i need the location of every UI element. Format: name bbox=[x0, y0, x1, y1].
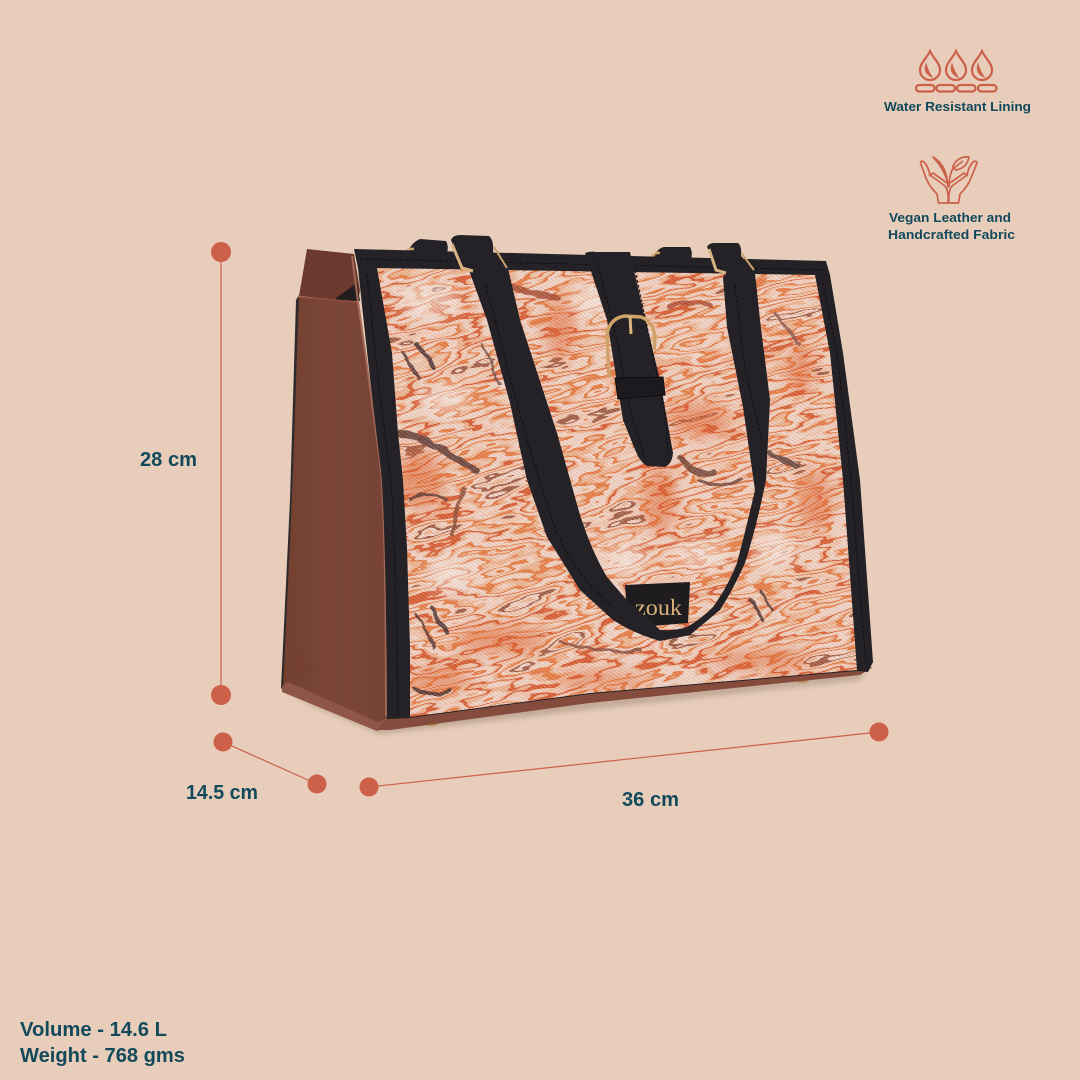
front handle bbox=[470, 263, 770, 641]
feature: vegan leather and handcrafted fabric: Vegan Leather and bbox=[889, 210, 1011, 225]
black frame bbox=[354, 249, 873, 719]
dimension: height 28 cm: 28 cm bbox=[140, 449, 197, 471]
feature: water resistant lining bbox=[884, 51, 1031, 114]
icon: water drops bbox=[916, 51, 996, 92]
shoulder loops with gold rings bbox=[451, 235, 754, 273]
logo patch bbox=[625, 582, 690, 628]
warm tint bbox=[370, 262, 865, 722]
back loops bbox=[405, 239, 692, 260]
buckle strap bbox=[585, 252, 673, 467]
feature: vegan leather and handcrafted fabric: Handcrafted Fabric bbox=[888, 227, 1015, 242]
frame stitching bbox=[360, 259, 866, 716]
metal feet bbox=[423, 675, 809, 726]
orange patches bbox=[396, 300, 831, 692]
light patches bbox=[400, 282, 797, 590]
marbled fabric panel bbox=[377, 268, 857, 717]
logo patch: zouk bbox=[635, 595, 683, 620]
dimension: height 28 cm bbox=[140, 242, 231, 705]
icon: hands holding plant bbox=[920, 157, 977, 203]
dimension: depth 14.5 cm bbox=[186, 732, 326, 804]
ground shadow bbox=[290, 672, 866, 734]
specs: volume and weight bbox=[20, 1019, 185, 1067]
side gusset bbox=[281, 249, 390, 731]
handbag illustration bbox=[211, 156, 972, 786]
feature: vegan leather and handcrafted fabric bbox=[888, 157, 1015, 242]
dimension: width 36 cm: 36 cm bbox=[622, 789, 679, 811]
dimension: width 36 cm bbox=[360, 722, 888, 811]
specs: volume and weight: Weight - 768 gms bbox=[20, 1045, 185, 1067]
gold buckle bbox=[607, 316, 655, 377]
dark marble veins bbox=[400, 287, 800, 694]
weave texture bbox=[370, 262, 865, 722]
bottom rim bbox=[377, 667, 873, 730]
buckle keeper bbox=[615, 377, 665, 399]
dimension: depth 14.5 cm: 14.5 cm bbox=[186, 782, 258, 804]
specs: volume and weight: Volume - 14.6 L bbox=[20, 1019, 167, 1041]
feature: water resistant lining: Water Resistant Lining bbox=[884, 99, 1031, 114]
